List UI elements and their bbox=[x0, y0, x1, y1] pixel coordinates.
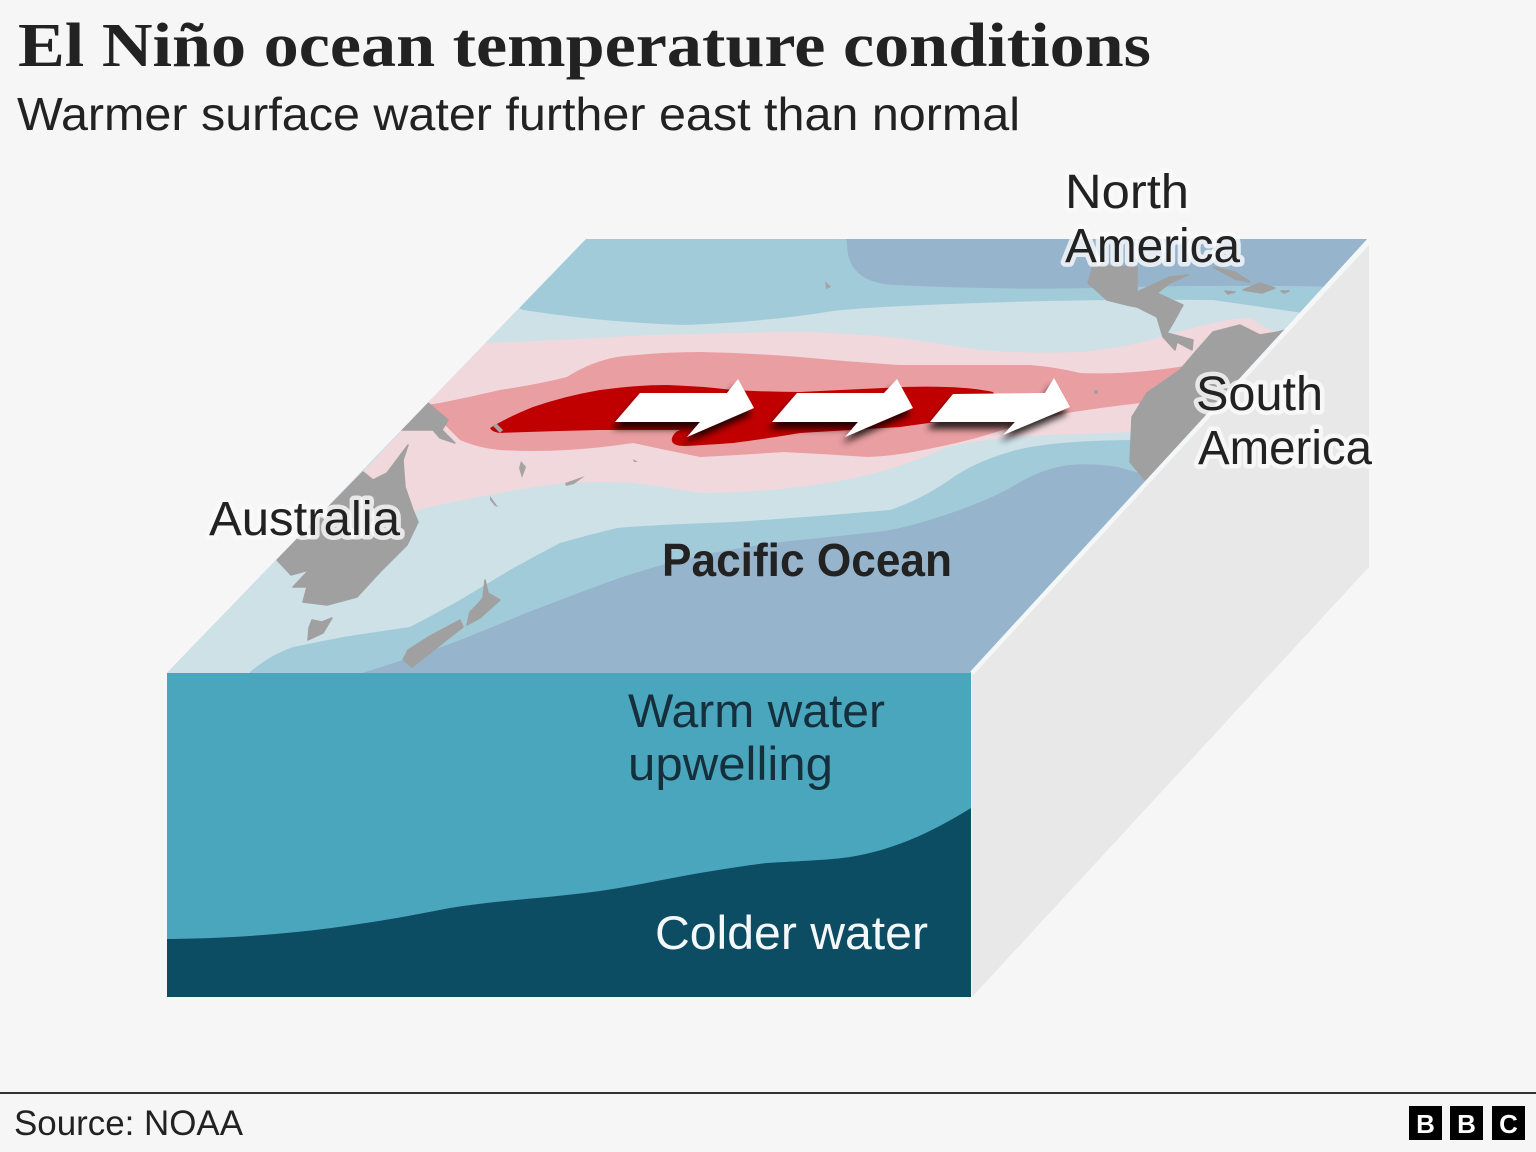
pink band bbox=[425, 352, 1185, 457]
arrow 2 bbox=[772, 379, 913, 437]
land: South America bbox=[1129, 324, 1284, 481]
BBC logo bbox=[1409, 1106, 1525, 1140]
title: El Niño ocean temperature conditions bbox=[18, 12, 1151, 80]
land: New Guinea bbox=[402, 403, 455, 443]
red warm core bbox=[490, 385, 1000, 446]
land: New Zealand bbox=[403, 580, 500, 667]
panel: ocean surface map bbox=[167, 239, 1367, 673]
cold deep blue base bbox=[362, 239, 1324, 673]
mid blue band bbox=[167, 239, 1367, 673]
label: Pacific Ocean: Pacific Ocean bbox=[662, 534, 952, 586]
label: South America: South bbox=[1196, 368, 1323, 421]
footer rule bbox=[0, 1092, 1536, 1094]
source: Source: NOAA bbox=[14, 1104, 244, 1143]
land: Australia bbox=[277, 445, 418, 605]
label: North America bbox=[1065, 166, 1240, 273]
land: Central America bbox=[1088, 266, 1193, 350]
BBC logo: C bbox=[1499, 1109, 1518, 1139]
label: Australia: Australia bbox=[209, 493, 400, 546]
BBC logo: B bbox=[1416, 1109, 1435, 1139]
BBC logo: B bbox=[1457, 1109, 1476, 1139]
warm water layer bbox=[167, 673, 971, 997]
label: North America: North bbox=[1065, 166, 1189, 219]
block edge highlight bbox=[972, 243, 1367, 673]
north dark blue patch bbox=[846, 239, 1367, 288]
label: Colder water: Colder water bbox=[655, 906, 928, 959]
label: South America bbox=[1196, 368, 1372, 475]
panel: front water cross-section bbox=[167, 673, 971, 997]
panel: block side face bbox=[972, 245, 1369, 997]
label: North America: America bbox=[1065, 220, 1240, 273]
colder water layer bbox=[167, 808, 971, 997]
arrows: warm water moving east bbox=[615, 378, 1070, 437]
light blue band bbox=[150, 300, 1320, 690]
subtitle: Warmer surface water further east than normal bbox=[17, 88, 1020, 140]
label: Warm water upwelling: upwelling bbox=[628, 737, 833, 790]
land: Caribbean islands bbox=[1213, 267, 1289, 294]
label: South America: America bbox=[1198, 422, 1372, 475]
pale pink band bbox=[280, 318, 1300, 565]
land: Pacific islands bbox=[490, 281, 831, 507]
label: Warm water upwelling bbox=[628, 684, 885, 790]
land: Galapagos bbox=[1094, 390, 1098, 394]
land: Tasmania bbox=[308, 618, 332, 640]
arrow 3 bbox=[930, 378, 1070, 435]
label: Warm water upwelling: Warm water bbox=[628, 684, 885, 737]
arrow 1 bbox=[615, 379, 754, 437]
